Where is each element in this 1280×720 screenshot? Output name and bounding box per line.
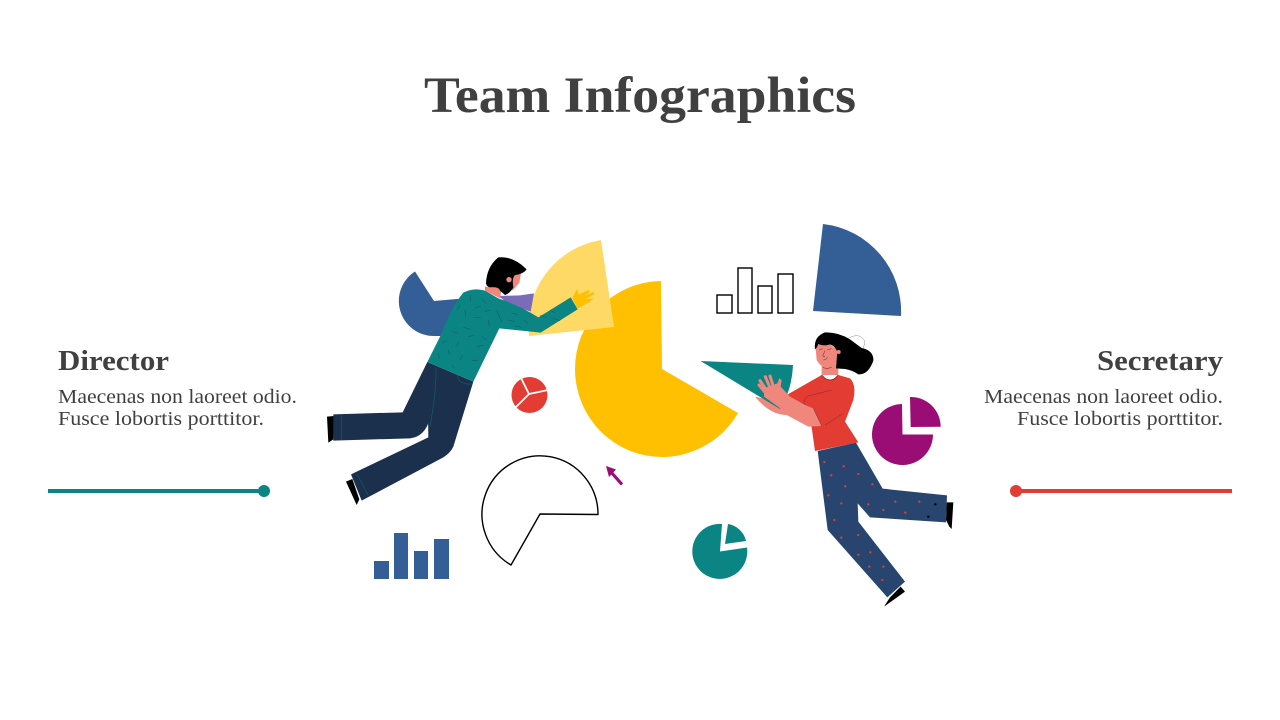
man: hand (572, 289, 594, 309)
woman: lower arm (755, 395, 822, 427)
heading: secretary: Secretary (1097, 346, 1223, 377)
connector line: secretary (1010, 485, 1232, 497)
woman: face (816, 344, 837, 368)
illustration: woman (755, 332, 953, 607)
title: Team Infographics (424, 68, 856, 124)
icon: large blue wedge (813, 224, 901, 316)
woman: pant dots (823, 461, 936, 581)
icon: outlined pie (482, 456, 598, 565)
man: hair and beard (486, 257, 527, 295)
man: shoes (327, 416, 359, 505)
text block: secretary description: Maecenas non laoreet odio. (984, 386, 1223, 408)
connector line: director (48, 485, 270, 497)
man: shirt underlayer (498, 293, 534, 312)
woman: hair strands (848, 336, 865, 348)
icon: purple pie (872, 397, 941, 465)
panel: director (48, 346, 297, 497)
woman: hand on wedge (759, 376, 813, 417)
icon: red pie (512, 377, 548, 413)
text block: director description: Maecenas non laoreet odio. (58, 386, 297, 408)
man: trousers (333, 362, 473, 501)
icon: blue pie behind man (399, 272, 480, 336)
icon: blue bar chart (374, 533, 449, 579)
woman: neck (822, 363, 838, 375)
man: neck and face (485, 273, 521, 298)
icon: teal wedge held by woman (700, 361, 793, 409)
woman: face details (819, 349, 832, 368)
icon: light yellow wedge (528, 240, 614, 336)
woman: hair (815, 332, 873, 374)
woman: t-shirt (787, 375, 858, 451)
man: sweater flecks (438, 295, 560, 368)
illustration: man (327, 257, 594, 505)
woman: pants (818, 443, 947, 597)
woman: shirt creases (804, 390, 843, 426)
woman: ear (837, 350, 841, 354)
text block: director description: Fusce lobortis porttitor. (58, 408, 264, 430)
woman: shoes (884, 502, 953, 607)
man: sweater (427, 289, 578, 382)
panel: secretary (984, 346, 1232, 497)
icon: outlined bar chart (717, 268, 793, 313)
woman: collar (822, 375, 838, 380)
heading: director: Director (58, 346, 169, 377)
text block: secretary description: Fusce lobortis porttitor. (1017, 408, 1223, 430)
icon: teal pie (692, 524, 747, 579)
arrow: purple (606, 466, 622, 484)
man: ear (506, 277, 512, 282)
icon: large yellow pie (575, 281, 738, 457)
